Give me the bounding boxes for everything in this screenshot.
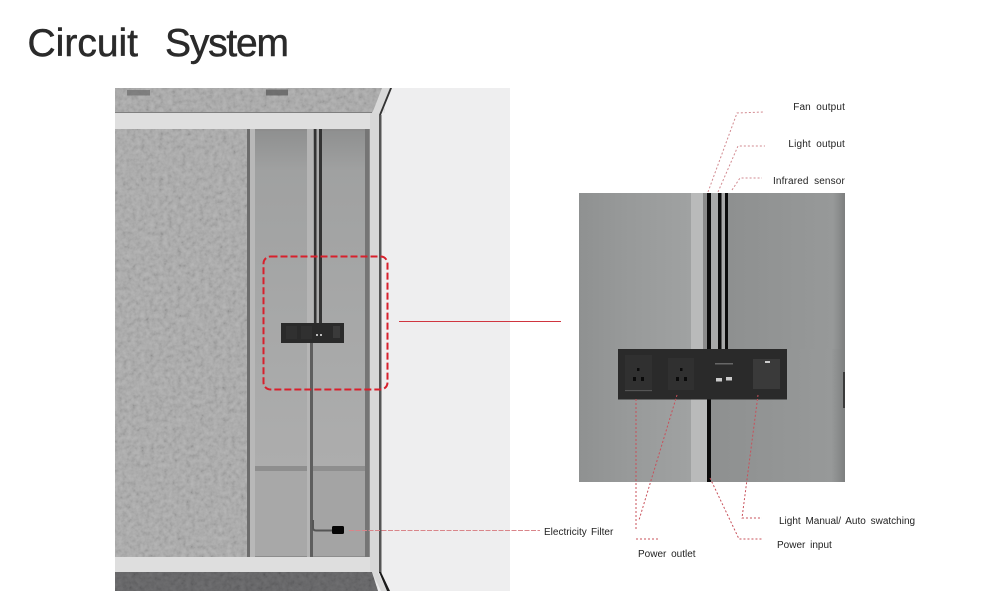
title: System <box>165 22 288 65</box>
socket panel detail <box>618 349 787 400</box>
leader line: electricity filter <box>349 530 540 532</box>
label: fan output: Fan output <box>793 102 845 113</box>
icon: ceiling vent right <box>266 90 288 96</box>
felt wall panel <box>115 129 247 557</box>
icon: light switch <box>753 359 780 389</box>
electrical socket panel small <box>281 323 344 343</box>
connector line: highlight to detail <box>399 320 561 322</box>
panel: detail photo <box>579 193 845 482</box>
red dashed highlight box <box>264 256 388 390</box>
right white post <box>370 113 382 573</box>
ceiling <box>115 88 392 115</box>
electricity filter box <box>313 520 344 534</box>
panel: booth interior photo <box>115 88 510 591</box>
icon: USB ports <box>715 363 733 382</box>
label: infrared sensor: Infrared sensor <box>773 176 846 187</box>
leader lines: top <box>708 112 765 192</box>
label: power outlet: Power outlet <box>638 549 696 560</box>
icon: ceiling vent left <box>127 90 150 96</box>
leader lines: bottom <box>636 395 763 539</box>
glass service panel <box>247 129 370 557</box>
label: light output: Light output <box>788 139 845 150</box>
label: power input: Power input <box>777 540 832 551</box>
bottom frame and carpet <box>115 557 390 591</box>
title: Circuit <box>28 22 138 65</box>
label: light manual auto switching: Light Manual/ Auto swatching <box>779 516 915 527</box>
icon: power outlet 1 <box>625 355 652 392</box>
white top frame <box>115 113 370 129</box>
icon: power outlet 2 <box>668 358 694 390</box>
label: electricity filter: Electricity Filter <box>544 527 614 538</box>
